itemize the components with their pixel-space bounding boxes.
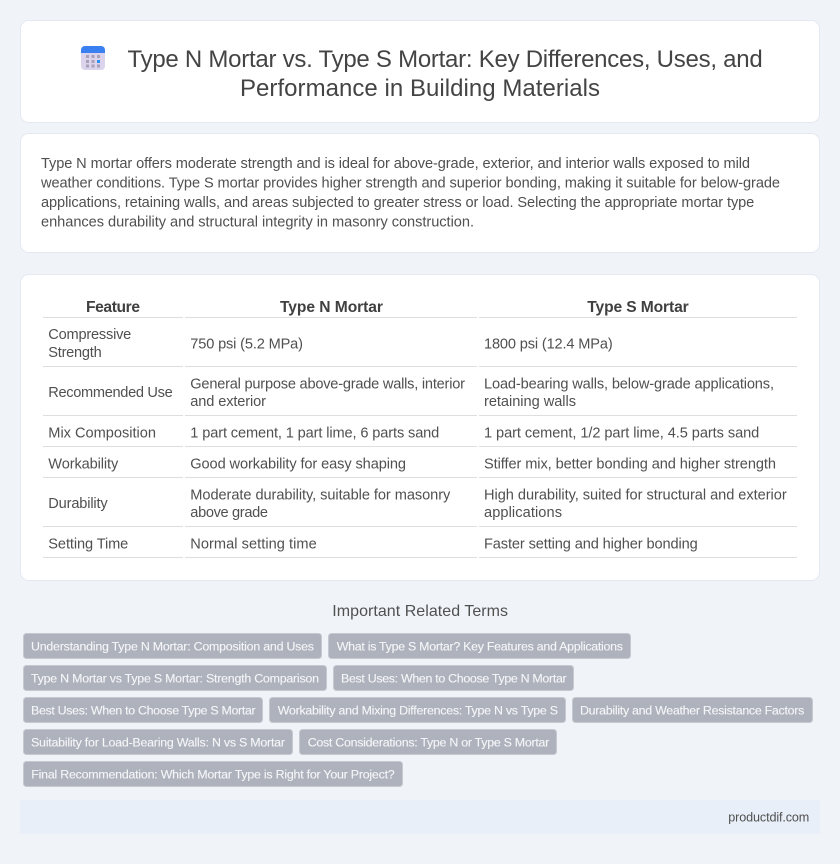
row: workability: [48, 456, 776, 472]
row: durability: applications: [484, 505, 562, 521]
row: setting time: Setting Time: [48, 536, 128, 552]
tag: Type N Mortar vs Type S Mortar: Strength Comparison: [31, 672, 319, 686]
title: Type N Mortar vs. Type S Mortar: Key Differences, Uses, and: [128, 46, 763, 73]
title: Performance in Building Materials: [240, 75, 600, 102]
row: compressive strength: [48, 327, 613, 361]
table header row: Type N Mortar: [280, 299, 383, 316]
tag: [24, 634, 322, 658]
row: compressive strength: Strength: [48, 345, 102, 361]
row: workability: Workability: [48, 456, 119, 472]
row: durability: [48, 487, 787, 521]
row: workability: Stiffer mix, better bonding and higher strength: [484, 456, 776, 472]
footer: productdif.com: [728, 810, 809, 824]
tag: [24, 698, 262, 722]
icon: calendar: [81, 46, 105, 70]
row: mix composition: Mix Composition: [48, 425, 156, 441]
row: durability: Durability: [48, 496, 108, 512]
row: mix composition: [48, 425, 759, 441]
row: workability: Good workability for easy shaping: [190, 456, 406, 472]
tag: [572, 698, 812, 722]
heading: important related terms: Important Related Terms: [332, 603, 508, 620]
row: recommended use: and exterior: [190, 394, 266, 410]
row: compressive strength: Compressive: [48, 327, 131, 343]
row: recommended use: Load-bearing walls, below-grade applications,: [484, 376, 774, 392]
table header row: Feature: [86, 299, 140, 316]
panel: related term tags: [24, 634, 812, 786]
row: compressive strength: 750 psi (5.2 MPa): [190, 336, 303, 352]
tag: [270, 698, 566, 722]
row: compressive strength: 1800 psi (12.4 MPa): [484, 336, 613, 352]
text block: intro paragraph: enhances durability and structural integrity in masonry construction.: [41, 214, 474, 230]
row: setting time: Faster setting and higher bonding: [484, 536, 698, 552]
row: recommended use: retaining walls: [484, 394, 576, 410]
tag: Best Uses: When to Choose Type S Mortar: [31, 704, 256, 718]
tag: Workability and Mixing Differences: Type N vs Type S: [278, 704, 558, 718]
tag: Durability and Weather Resistance Factors: [580, 704, 804, 718]
tag: [300, 730, 556, 754]
tag: What is Type S Mortar? Key Features and Applications: [337, 640, 623, 654]
row: durability: High durability, suited for structural and exterior: [484, 487, 787, 503]
row: setting time: Normal setting time: [190, 536, 317, 552]
text block: intro paragraph: Type N mortar offers moderate strength and is ideal for above-grade, exterior, and interior walls exposed to mild: [41, 156, 750, 172]
text block: intro paragraph: weather conditions. Type S mortar provides higher strength and superior bonding, making it suitable for below-grade: [40, 175, 780, 191]
row: recommended use: [48, 376, 774, 410]
tag: Suitability for Load-Bearing Walls: N vs S Mortar: [31, 736, 285, 750]
footer: [20, 800, 820, 834]
panel: header: [20, 20, 820, 122]
tag: [24, 730, 292, 754]
row: mix composition: 1 part cement, 1/2 part lime, 4.5 parts sand: [484, 425, 759, 441]
row: setting time: [48, 536, 698, 552]
panel: intro text: [20, 134, 820, 252]
text block: intro paragraph: [40, 156, 780, 230]
row: recommended use: General purpose above-grade walls, interior: [190, 376, 465, 392]
tag: Final Recommendation: Which Mortar Type is Right for Your Project?: [31, 768, 395, 782]
row: durability: Moderate durability, suitable for masonry: [190, 487, 451, 503]
tag: [334, 666, 574, 690]
row: durability: above grade: [190, 505, 268, 521]
tag: Understanding Type N Mortar: Composition and Uses: [31, 640, 314, 654]
table header row: Type S Mortar: [587, 299, 689, 316]
tag: [328, 634, 630, 658]
row: recommended use: Recommended Use: [48, 385, 173, 401]
text block: intro paragraph: applications, retaining walls, and areas subjected to greater stress or load. Selecting the appropriate mortar type: [41, 195, 754, 211]
panel: comparison table: [20, 274, 820, 580]
title: [128, 46, 763, 102]
tag: [24, 666, 326, 690]
table header row: [86, 299, 689, 316]
row: mix composition: 1 part cement, 1 part lime, 6 parts sand: [190, 425, 439, 441]
tag: [24, 762, 402, 786]
tag: Cost Considerations: Type N or Type S Mortar: [308, 736, 549, 750]
tag: Best Uses: When to Choose Type N Mortar: [341, 672, 567, 686]
